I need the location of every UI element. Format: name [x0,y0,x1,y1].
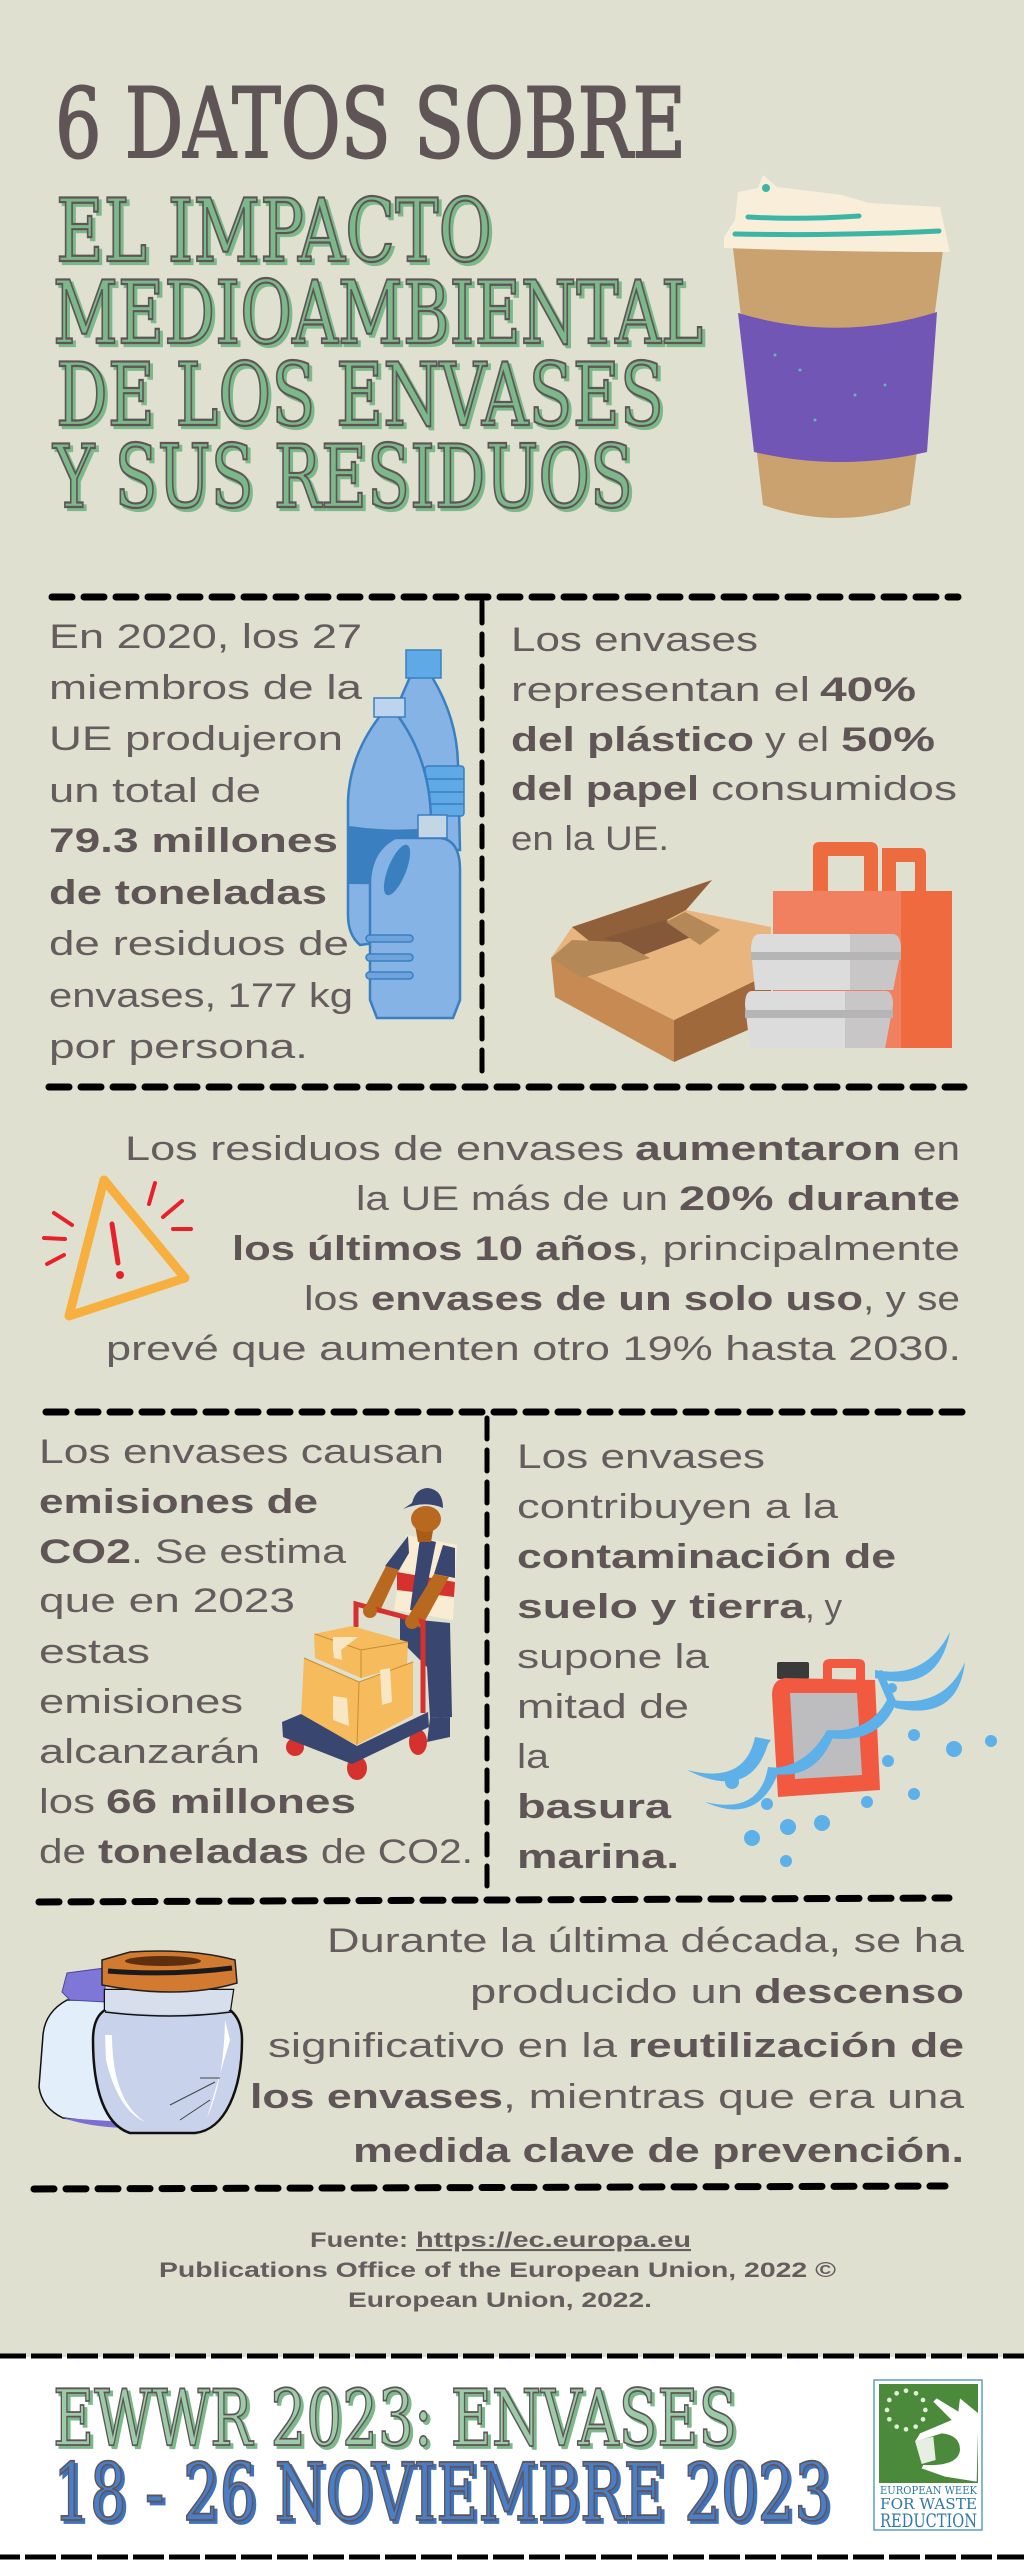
text block: emisiones de CO2: . Se estima [131,1533,346,1571]
title: el impacto medioambiental: EL IMPACTO [56,180,492,282]
text block: aumento de residuos [106,1130,961,1368]
text block: descenso en reutilización: significativo en la [268,2027,617,2065]
text block: contaminación y basura marina: Los envases [517,1438,765,1476]
icon: cardboard box, bag and food containers [551,842,952,1062]
divider: first row vertical [480,602,484,1072]
divider: source top [34,2186,945,2189]
text block: emisiones de CO2: que en 2023 [39,1582,295,1620]
divider: second row bottom [39,1898,949,1902]
icon: coffee cup [724,175,950,518]
text block: aumento de residuos: Los residuos de envases [125,1130,624,1168]
text block: emisiones de CO2: Los envases causan [39,1433,444,1471]
title: 6 datos sobre: 6 DATOS SOBRE [55,68,686,180]
text block: descenso en reutilización: reutilización de [628,2027,964,2065]
text block: contaminación y basura marina: suelo y tierra [517,1588,806,1626]
source credits: Fuente: [310,2229,408,2252]
icon: glass jars [39,1951,242,2133]
text block: descenso en reutilización [250,1922,964,2170]
text block: 79.3 millones de toneladas: miembros de la [49,669,362,707]
text block: 79.3 millones de toneladas: UE produjeron [49,720,343,758]
icon: warning triangle [44,1180,191,1316]
logo: European Week for Waste Reduction: REDUCTION [880,2510,977,2532]
text block: aumento de residuos: 20% durante [679,1180,960,1218]
divider: first row bottom [49,1084,964,1090]
text block: descenso en reutilización: descenso [754,1973,964,2011]
text block: 79.3 millones de toneladas: por persona. [49,1028,308,1066]
icon: plastic bottles [348,650,464,1018]
text block: emisiones de CO2: 66 millones [106,1783,356,1821]
text block: emisiones de CO2: estas [39,1633,150,1671]
text block: descenso en reutilización: Durante la última década, se ha [327,1922,964,1960]
text block: 40% del plástico y 50% del papel [511,621,957,858]
divider: second row top [46,1408,962,1416]
text block: emisiones de CO2: de [39,1833,86,1871]
text block: aumento de residuos: , y se [863,1280,960,1318]
text block: descenso en reutilización: producido un [470,1973,743,2011]
text block: descenso en reutilización: , mientras que era una [503,2078,964,2116]
text block: emisiones de CO2 [39,1433,473,1871]
title: el impacto medioambiental: Y SUS RESIDUOS [52,426,633,528]
logo: European Week for Waste Reduction [874,2380,982,2532]
text block: aumento de residuos: los últimos 10 años [232,1230,637,1268]
source credits: https://ec.europa.eu [416,2229,691,2252]
text block: 40% del plástico y 50% del papel: representan el [511,671,810,709]
text block: 40% del plástico y 50% del papel: del plástico [511,721,754,759]
text block: aumento de residuos: , principalmente [637,1230,960,1268]
icon: delivery worker with cart [282,1488,457,1780]
text block: contaminación y basura marina: contaminación de [517,1538,896,1576]
text block: aumento de residuos: la UE más de un [356,1180,668,1218]
title: el impacto medioambiental: MEDIOAMBIENTAL [53,262,703,364]
footer panel [0,2356,1024,2560]
text block: 79.3 millones de toneladas: envases, 177 kg [49,977,353,1015]
source credits: European Union, 2022. [348,2289,652,2312]
text block: contaminación y basura marina: marina. [517,1838,679,1876]
text block: emisiones de CO2: de CO2. [321,1833,473,1871]
text block: contaminación y basura marina [517,1438,896,1876]
text block: 40% del plástico y 50% del papel: del papel [511,770,699,808]
text block: 79.3 millones de toneladas: de toneladas [49,874,327,912]
text block: emisiones de CO2: emisiones de [39,1483,318,1521]
text block: contaminación y basura marina: basura [517,1788,673,1826]
text block: contaminación y basura marina: contribuyen a la [517,1488,838,1526]
logo: European Week for Waste Reduction: FOR WASTE [880,2495,977,2513]
text block: emisiones de CO2: alcanzarán [39,1733,260,1771]
divider: first row top [52,594,958,600]
text block: 40% del plástico y 50% del papel: 40% [820,671,916,709]
text block: 40% del plástico y 50% del papel: y el [765,721,829,759]
logo: European Week for Waste Reduction: EUROPEAN WEEK [880,2484,978,2497]
text block: 79.3 millones de toneladas: un total de [49,772,261,810]
text block: 79.3 millones de toneladas [49,618,362,1066]
text block: 40% del plástico y 50% del papel: Los envases [511,621,758,659]
text block: contaminación y basura marina: mitad de [517,1688,689,1726]
text block: 79.3 millones de toneladas: 79.3 millones [49,822,338,860]
text block: descenso en reutilización: medida clave de prevención. [353,2132,964,2170]
title: el impacto medioambiental [52,180,703,528]
divider: second row vertical [484,1418,490,1886]
text block: contaminación y basura marina: supone la [517,1638,709,1676]
icon: plastic canister in waves [687,1632,997,1867]
text block: aumento de residuos: envases de un solo uso [371,1280,863,1318]
text block: 79.3 millones de toneladas: En 2020, los 27 [49,618,362,656]
text block: emisiones de CO2: CO2 [39,1533,131,1571]
text block: 40% del plástico y 50% del papel: 50% [841,721,935,759]
text block: contaminación y basura marina: la [517,1738,549,1776]
text block: aumento de residuos: los [304,1280,359,1318]
text block: 79.3 millones de toneladas: de residuos de [49,925,349,963]
text block: aumento de residuos: aumentaron [635,1130,901,1168]
text block: descenso en reutilización: los envases [250,2078,503,2116]
title: el impacto medioambiental: DE LOS ENVASES [56,344,664,446]
text block: emisiones de CO2: emisiones [39,1683,243,1721]
text block: emisiones de CO2: toneladas [98,1833,309,1871]
text block: 40% del plástico y 50% del papel: consumidos [711,770,957,808]
text block: 40% del plástico y 50% del papel: en la UE. [511,820,669,858]
footer heading: EWWR 2023 envases: EWWR 2023: ENVASES [53,2374,737,2464]
text block: aumento de residuos: prevé que aumenten otro 19% hasta 2030. [106,1330,961,1368]
source credits: Publications Office of the European Union, 2022 © [159,2259,837,2282]
text block: emisiones de CO2: los [39,1783,95,1821]
text block: contaminación y basura marina: , y [805,1588,842,1626]
text block: aumento de residuos: en [913,1130,960,1168]
source credits [159,2229,837,2312]
